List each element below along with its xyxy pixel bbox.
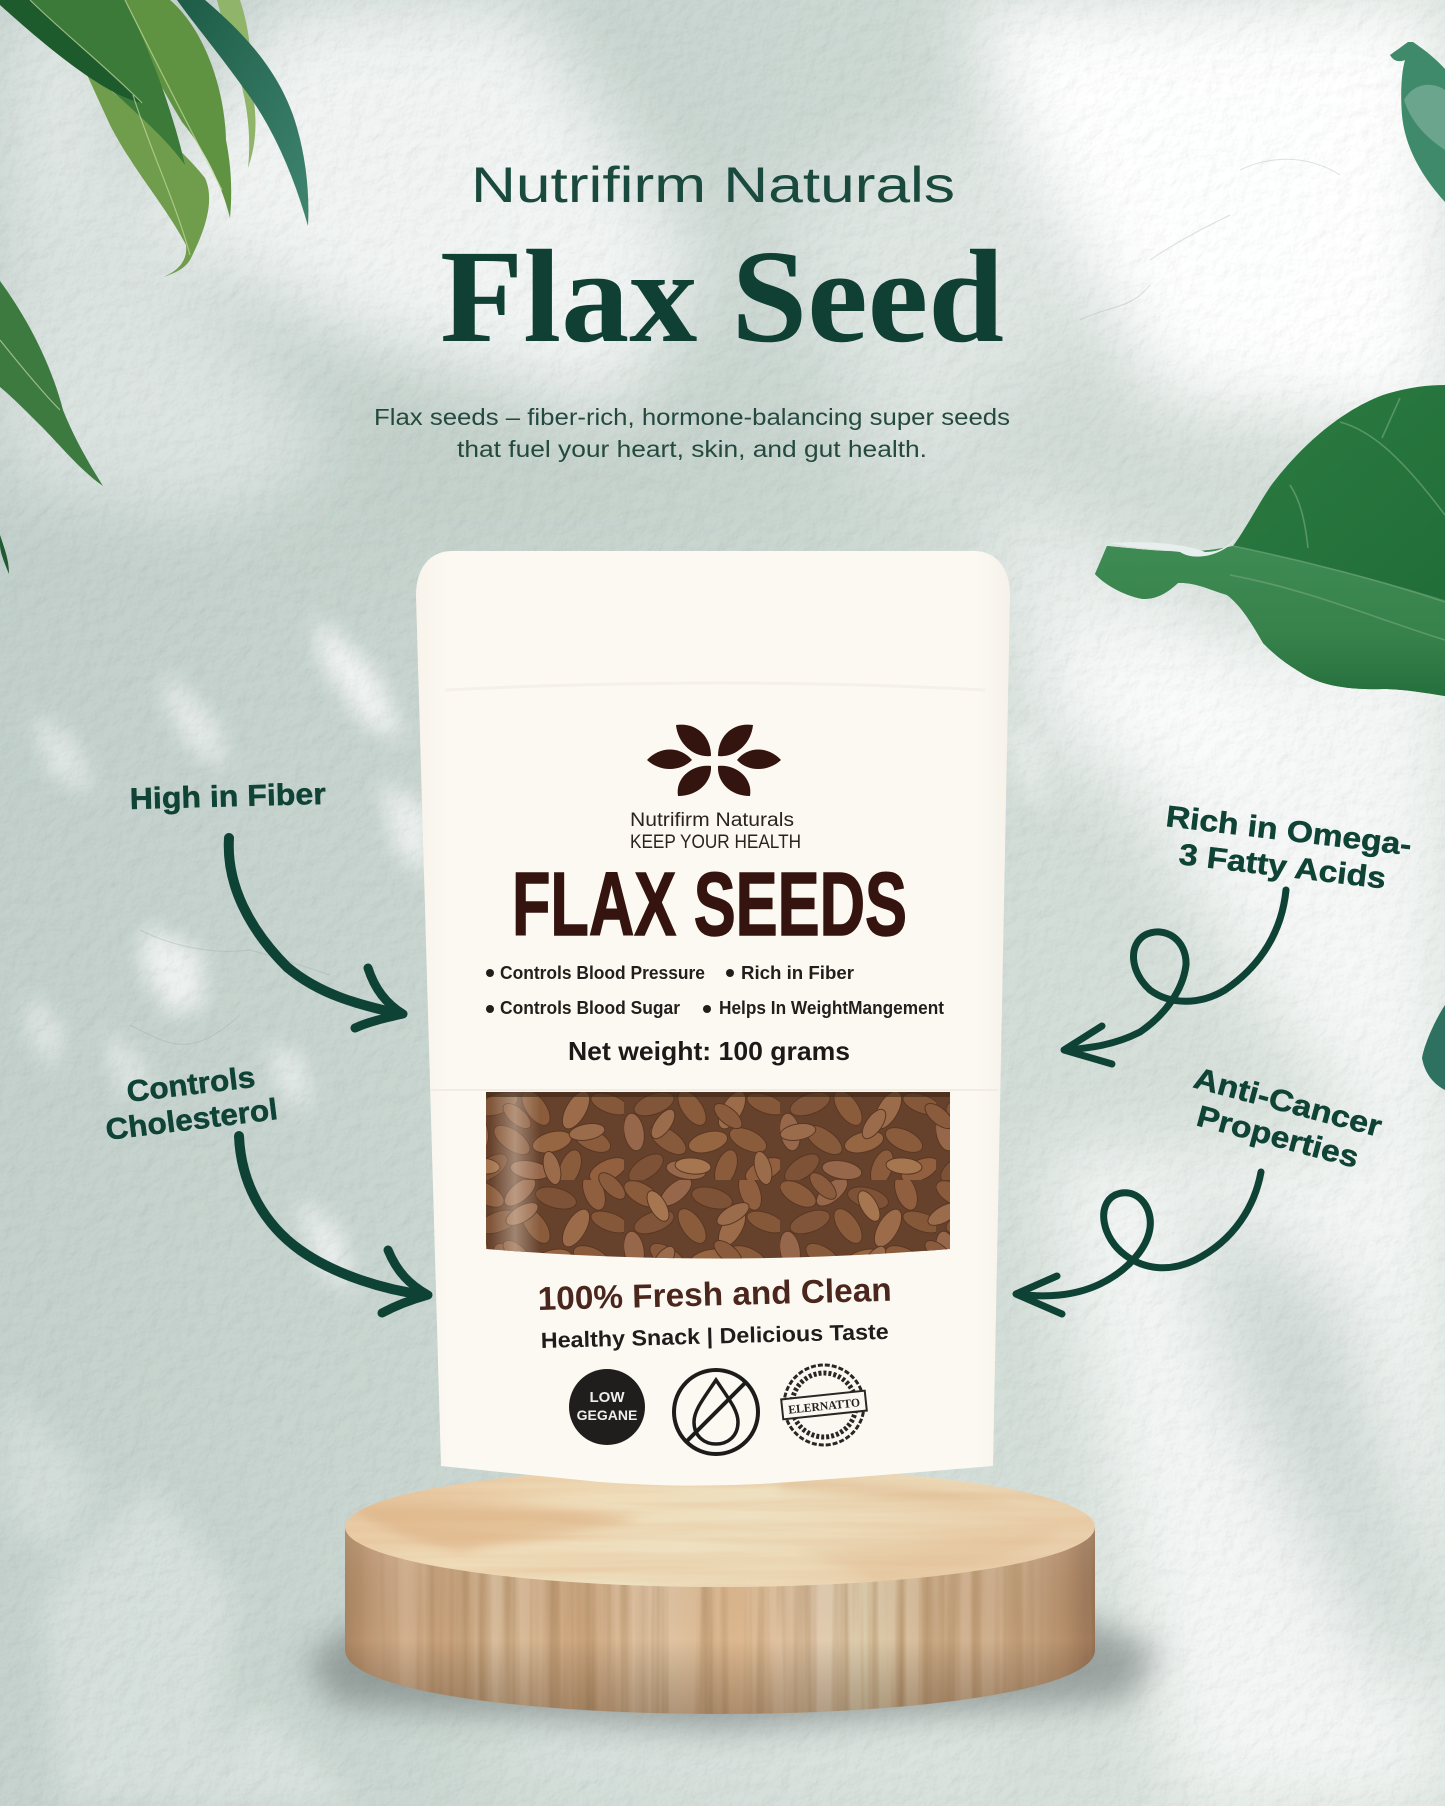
badge: no oil drop	[674, 1370, 758, 1454]
callout: omega-3: Rich in Omega-	[1164, 800, 1413, 862]
badge: organic: GEGANE	[577, 1407, 637, 1423]
leaf: large right	[1095, 385, 1445, 696]
benefit bullets on pouch: Rich in Fiber	[741, 963, 854, 983]
teal leaf	[177, 0, 308, 226]
clear window edge	[430, 1089, 998, 1091]
dark front leaf	[0, 0, 142, 103]
subtitle text: Flax seeds – fiber-rich, hormone-balancing super seeds	[374, 404, 1010, 430]
callout: anti-cancer	[1190, 1062, 1386, 1175]
benefit bullets on pouch: Helps In WeightMangement	[719, 998, 944, 1018]
badge: stamp	[781, 1365, 867, 1445]
subtitle text: that fuel your heart, skin, and gut health.	[457, 436, 927, 462]
brand heading: Nutrifirm Naturals	[471, 157, 955, 213]
badge: organic: LOW	[590, 1389, 625, 1406]
callout: anti-cancer: Anti-Cancer	[1190, 1062, 1386, 1144]
brand name on pouch: Nutrifirm Naturals	[630, 810, 794, 831]
callout: controls cholesterol: Cholesterol	[104, 1093, 280, 1147]
arrow: high in fiber	[229, 838, 403, 1028]
wooden platform	[345, 1467, 1095, 1720]
snack claim: Healthy Snack | Delicious Taste	[540, 1319, 889, 1353]
deep green leaf	[30, 0, 185, 165]
leaf: top right	[1390, 42, 1445, 202]
mid green leaf	[122, 0, 231, 218]
arrow: anti-cancer	[1016, 1172, 1261, 1314]
leaf: small right edge	[1422, 1005, 1445, 1090]
arrow: omega-3	[1064, 890, 1286, 1064]
benefit bullets on pouch	[486, 963, 944, 1018]
badge: organic	[569, 1369, 645, 1445]
product pouch	[416, 551, 1010, 1486]
callout: controls cholesterol: Controls	[125, 1061, 257, 1109]
leaves: top left cluster	[0, 0, 308, 277]
benefit bullets on pouch: Controls Blood Pressure	[500, 963, 705, 983]
callout: omega-3: 3 Fatty Acids	[1177, 838, 1388, 896]
callout: controls cholesterol	[104, 1061, 280, 1147]
pouch body	[416, 551, 1010, 1486]
callout: anti-cancer: Properties	[1193, 1100, 1362, 1175]
platform shadow	[305, 1620, 1160, 1730]
benefit bullets on pouch: Controls Blood Sugar	[500, 998, 680, 1018]
fresh claim: 100% Fresh and Clean	[537, 1271, 892, 1317]
main title: Flax Seed	[440, 222, 1004, 370]
callout: high in fiber: High in Fiber	[129, 778, 326, 816]
leaf: left edge	[0, 281, 103, 574]
platform top surface	[345, 1467, 1095, 1587]
net weight: Net weight: 100 grams	[568, 1036, 850, 1066]
leaf veins	[30, 0, 222, 255]
seeds in window	[486, 1092, 950, 1268]
brand name on pouch	[630, 810, 801, 853]
product name on pouch: FLAX SEEDS	[512, 855, 907, 955]
subtitle text	[374, 404, 1010, 462]
callout: omega-3	[1164, 800, 1413, 896]
small pale leaf	[217, 0, 255, 168]
brand name on pouch: KEEP YOUR HEALTH	[630, 832, 801, 853]
badge: stamp: ELERNATTO	[788, 1395, 861, 1417]
zip seal crease	[445, 683, 985, 690]
light green leaf	[83, 66, 209, 277]
wood plank markings	[350, 1478, 1060, 1582]
arrow: controls cholesterol	[239, 1136, 428, 1313]
platform side	[345, 1520, 1095, 1720]
brand logo	[647, 725, 781, 796]
